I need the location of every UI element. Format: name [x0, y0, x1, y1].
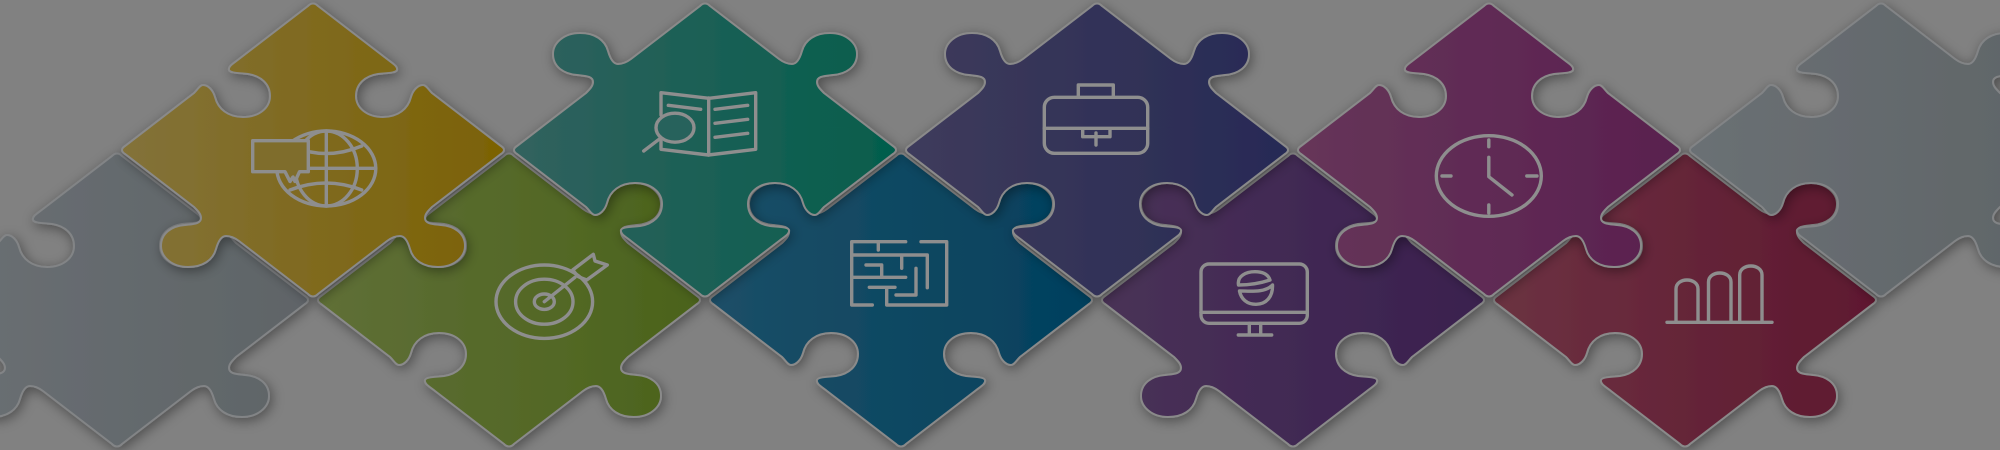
puzzle piece: navy [906, 4, 1288, 296]
puzzle piece: teal [514, 4, 896, 296]
icon: briefcase [1044, 85, 1148, 153]
icon: monitor with chart [1201, 264, 1307, 335]
icon: maze [852, 242, 947, 305]
puzzle piece: purple [1102, 154, 1484, 446]
icon: globe with speech bubble [253, 131, 376, 206]
puzzle piece: green [318, 154, 700, 446]
icon: target with arrow [496, 254, 607, 338]
icon: bar chart [1667, 266, 1772, 322]
puzzle piece: yellow [122, 4, 504, 296]
puzzle piece: gray right [1690, 4, 2000, 296]
puzzle piece: blue [710, 154, 1092, 446]
icon: open book with magnifier [644, 93, 756, 155]
puzzle piece: magenta [1298, 4, 1680, 296]
puzzle piece: gray left [0, 154, 308, 446]
icon: clock [1436, 136, 1541, 216]
puzzle piece: maroon [1494, 154, 1876, 446]
